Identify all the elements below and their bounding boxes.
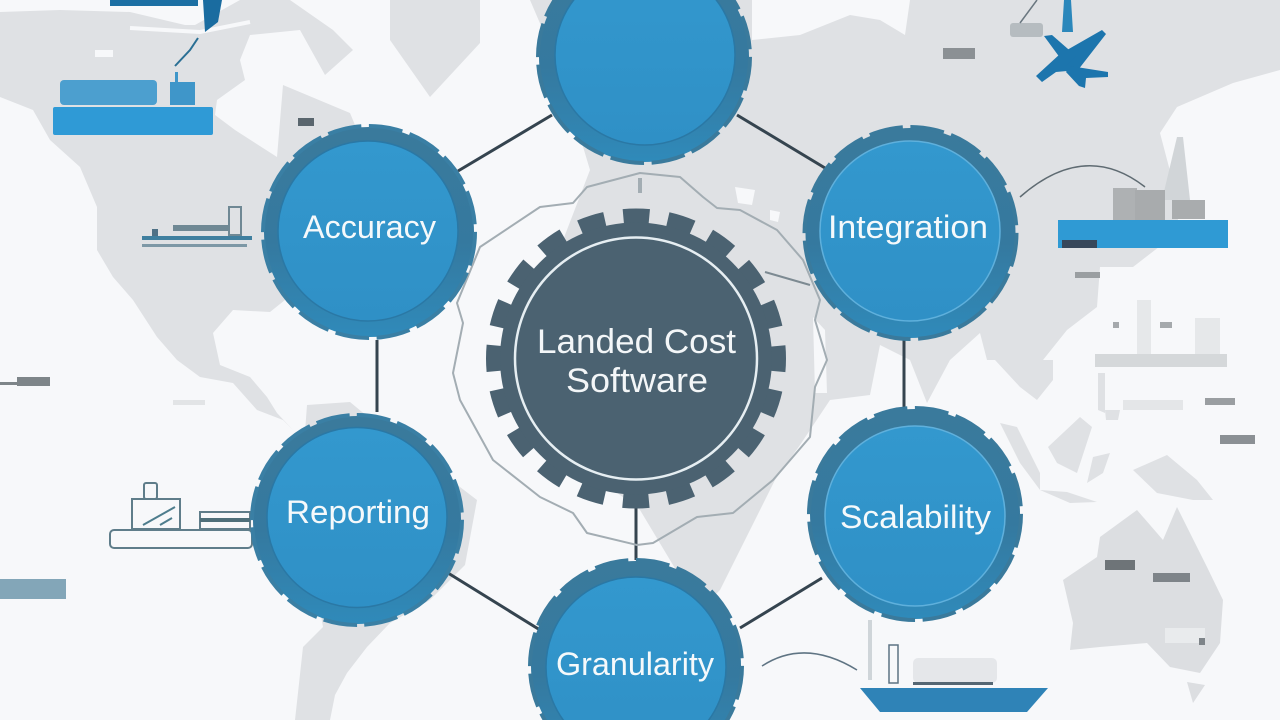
icon: tower and crane top right [1010,0,1073,37]
Indonesia and New Guinea [1000,373,1213,503]
Eurasia and Africa [530,0,1280,610]
hub: Landed Cost Software [494,216,778,501]
hub: Landed Cost Software: Software [566,362,708,400]
node: top (blank) [538,0,750,163]
Australia [1063,507,1223,673]
node: Accuracy [263,126,475,338]
hub: Landed Cost Software: Landed Cost [537,323,737,361]
North America [0,0,355,430]
connector lines [377,115,904,630]
inland seas and gulfs [735,0,1200,393]
icon: ship bottom right [762,620,1048,712]
outline ring around hub [453,173,827,545]
node: Integration [804,127,1016,339]
South America [295,402,477,720]
decorative harbor right [1095,300,1227,367]
icon: airplane [1036,30,1108,88]
Greenland [390,0,480,97]
node: Accuracy: Accuracy [303,209,436,245]
icon: outline ship left [110,483,252,548]
icon: small ship left [142,207,252,247]
node: Reporting [252,415,462,625]
node: Reporting: Reporting [286,494,430,530]
node: Scalability: Scalability [840,499,991,535]
icon: cargo ship top left [53,0,222,135]
Kamchatka [1233,80,1267,165]
node: Granularity: Granularity [556,646,714,682]
icon: container ship right [1020,137,1228,278]
node: Granularity [530,560,742,720]
node: Integration: Integration [828,209,988,245]
node: Scalability [809,408,1021,620]
